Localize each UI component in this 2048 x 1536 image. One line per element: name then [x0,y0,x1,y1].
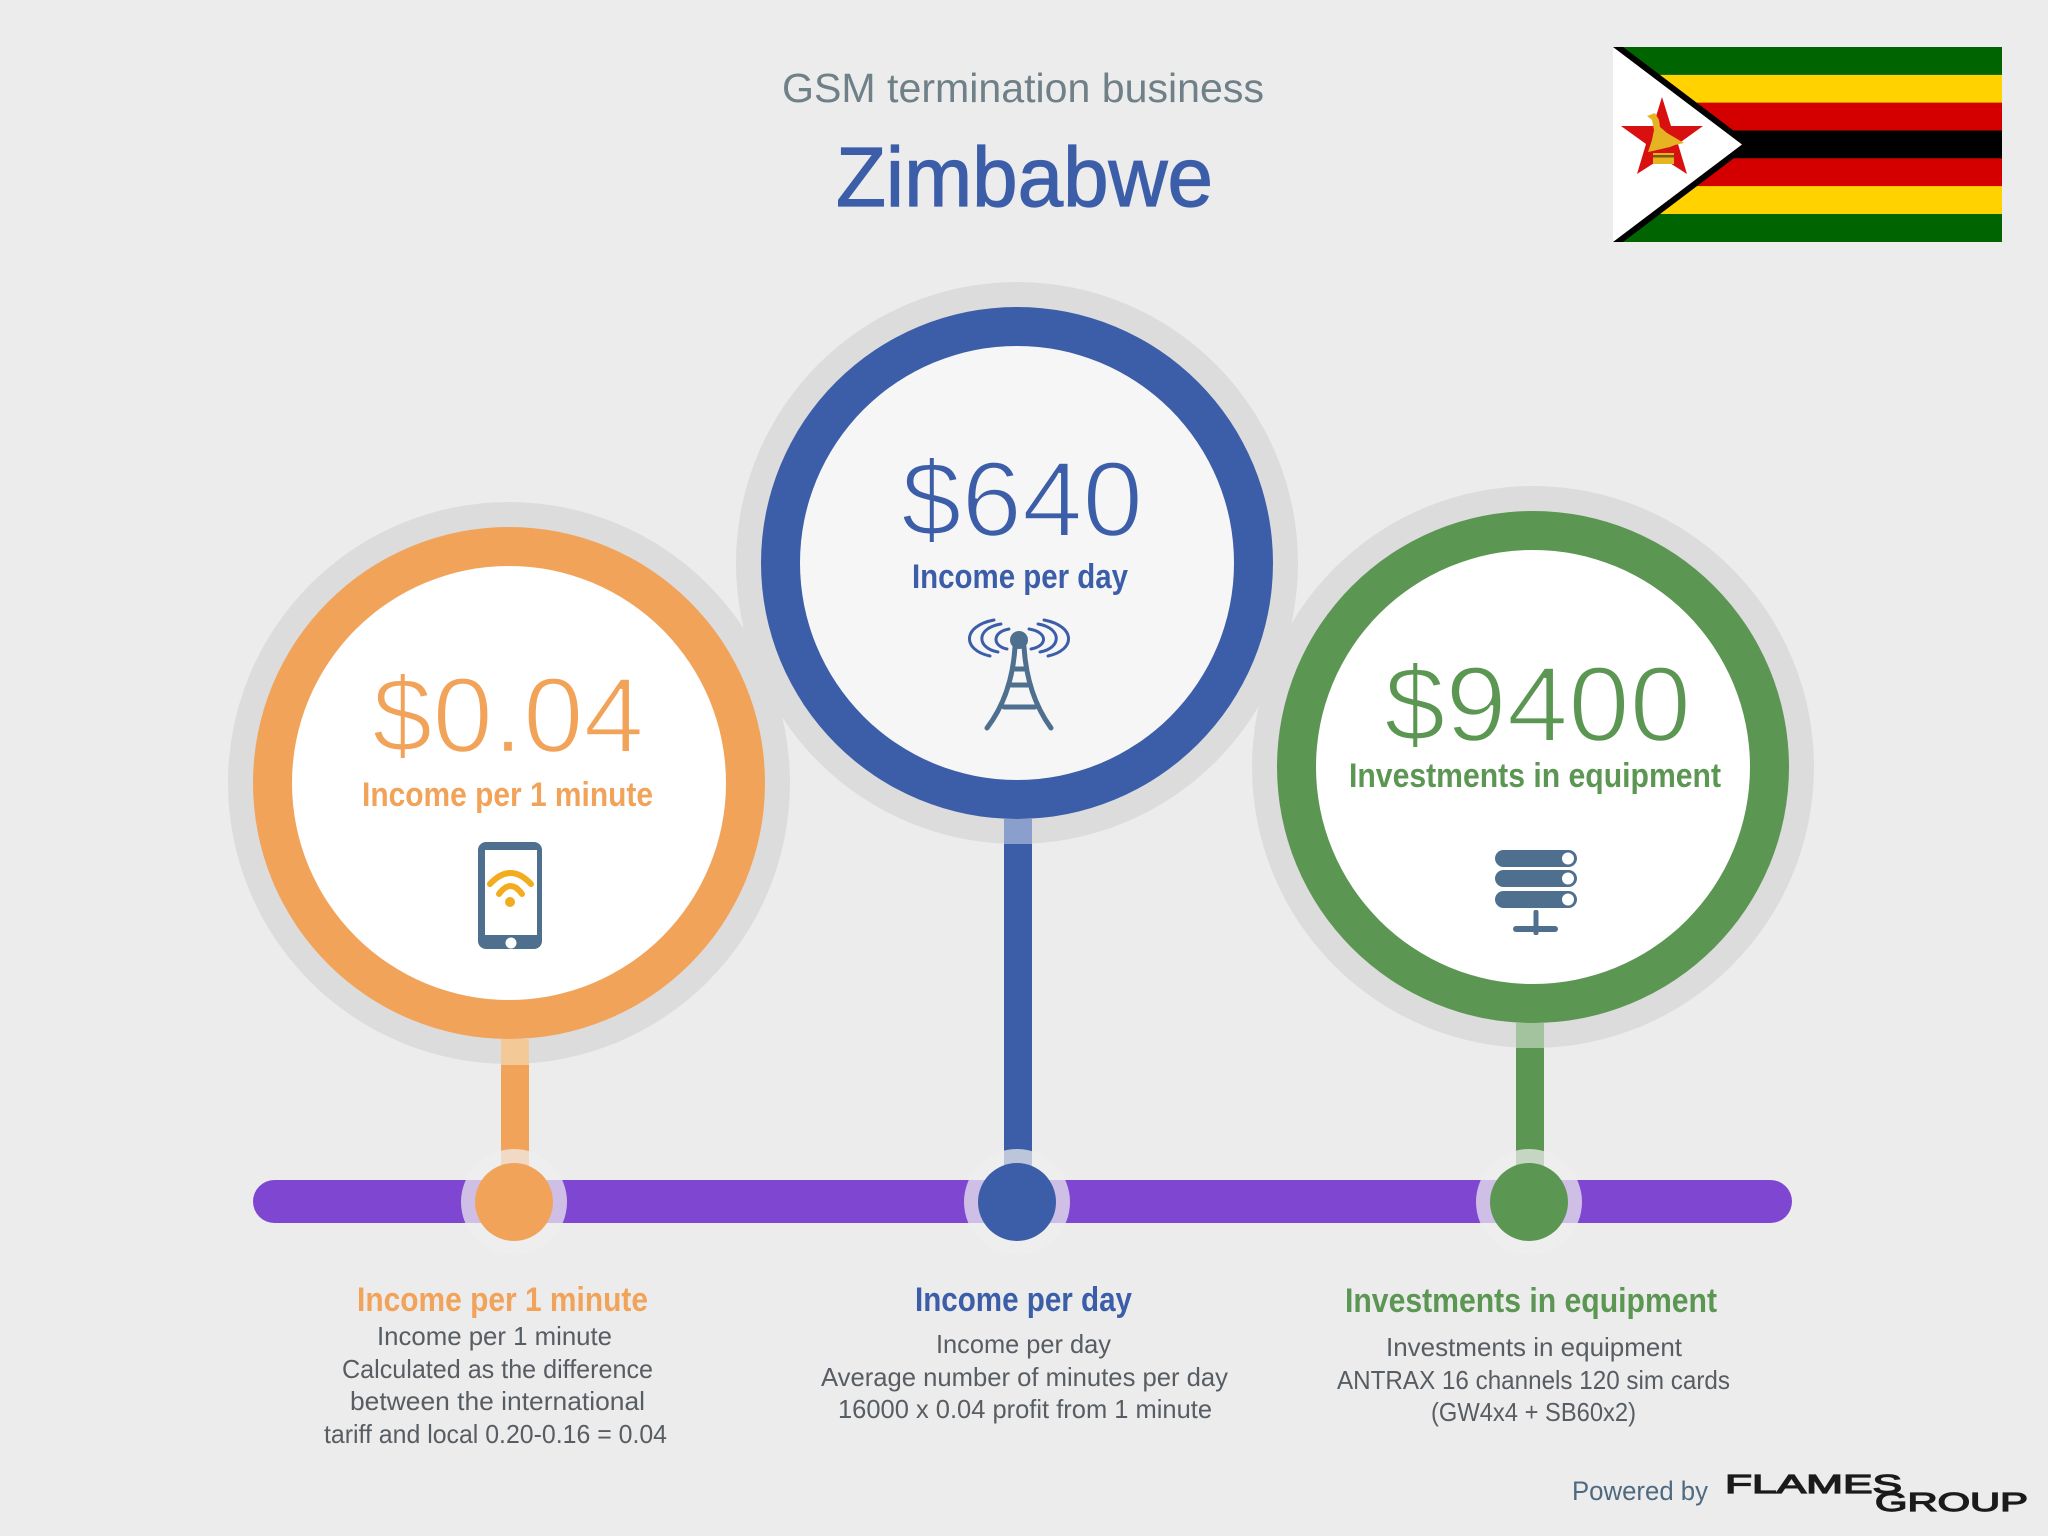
text block: income per 1 minute: tariff and local 0.20-0.16 = 0.04 [324,1419,667,1449]
timeline bar [253,1180,1792,1223]
title: Zimbabwe [836,130,1213,224]
text block: income per day: 16000 x 0.04 profit from 1 minute [838,1394,1212,1424]
text block: income per day: Average number of minutes per day [821,1362,1228,1392]
circle label: income per 1 minute: Income per 1 minute [362,776,653,814]
text block: income per day: Income per day [915,1281,1132,1319]
timeline marker: green [1476,1149,1582,1255]
text block: income per day: Income per day [936,1329,1111,1359]
icon: antenna tower [969,620,1069,728]
text block: income per 1 minute: Income per 1 minute [377,1321,612,1351]
panel: income per day connector [1004,819,1032,1180]
timeline marker: blue [964,1149,1070,1255]
circle label: investments in equipment: Investments in equipment [1349,757,1721,795]
value: $0.04: $0.04 [372,655,644,775]
value: $9400: $9400 [1384,644,1691,764]
text block: investments in equipment [1337,1282,1730,1427]
value: $640: $640 [901,439,1143,559]
panel: income per 1 minute connector [501,1039,529,1180]
text block: income per 1 minute: Income per 1 minute [357,1281,648,1319]
timeline marker: orange [461,1149,567,1255]
panel: blue circle [736,282,1298,844]
text block: investments in equipment: (GW4x4 + SB60x2) [1431,1397,1636,1427]
icon: phone with wifi [478,842,542,949]
subtitle: GSM termination business [782,65,1264,111]
text block: investments in equipment: Investments in equipment [1345,1282,1717,1320]
text block: income per 1 minute: between the international [350,1386,645,1416]
panel: green circle [1252,486,1814,1048]
text block: investments in equipment: ANTRAX 16 channels 120 sim cards [1337,1365,1730,1395]
text block: investments in equipment: Investments in equipment [1386,1332,1683,1362]
icon: Zimbabwe flag [1613,47,2002,242]
text block: income per 1 minute: Calculated as the difference [342,1354,653,1384]
panel: investments connector [1516,1023,1544,1180]
logo: Flames Group: FLAMES [1725,1469,1902,1499]
footer: powered by: Powered by [1572,1476,1708,1506]
icon: server rack [1495,850,1577,935]
logo: Flames Group: GROUP [1875,1487,2028,1517]
text block: income per 1 minute [324,1281,667,1449]
panel: orange circle [228,502,790,1064]
text block: income per day [821,1281,1228,1424]
circle label: income per day: Income per day [912,558,1128,596]
logo: Flames Group [1725,1469,2028,1517]
